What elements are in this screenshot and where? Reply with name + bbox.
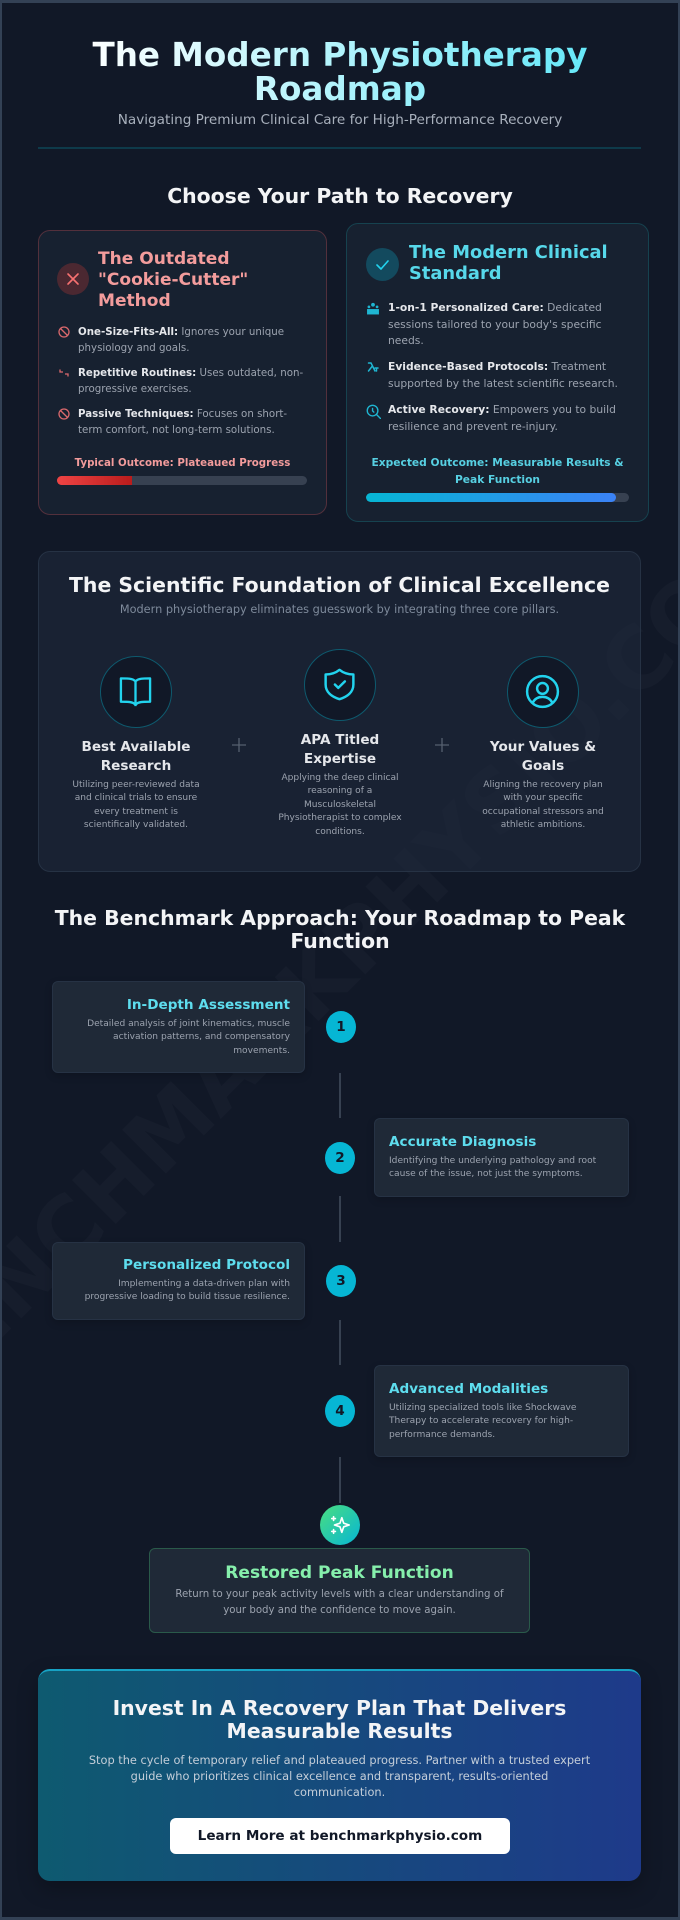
cta heading: Invest In A Recovery Plan That Delivers xyxy=(113,1696,566,1720)
pillar title: Goals xyxy=(522,758,564,774)
step 2 number: 2 xyxy=(335,1150,345,1166)
pillar text: reasoning of a xyxy=(308,786,372,796)
pillar title: Your Values & xyxy=(490,739,596,755)
modern heading: The Modern Clinical xyxy=(409,242,608,263)
timeline connector 4 xyxy=(339,1457,341,1503)
step title: Accurate Diagnosis xyxy=(389,1134,536,1150)
cta heading xyxy=(113,1696,566,1743)
panel: modern standard xyxy=(346,223,649,522)
heading: benchmark approach: The Benchmark Approach: Your Roadmap to Peak xyxy=(55,906,625,930)
step 3 card xyxy=(52,1242,305,1320)
pillar title xyxy=(300,732,379,767)
final title: Restored Peak Function xyxy=(225,1563,454,1583)
step text: Implementing a data-driven plan with xyxy=(118,1278,290,1288)
step text xyxy=(85,1278,290,1302)
icon: magnifier xyxy=(366,404,381,419)
modern item 3: Active Recovery: Empowers you to build xyxy=(388,403,616,416)
step text: activation patterns, and compensatory xyxy=(113,1032,290,1042)
step 4 number: 4 xyxy=(335,1403,345,1419)
modern heading xyxy=(409,242,608,284)
step 4 number xyxy=(325,1395,355,1427)
pillar title: Research xyxy=(101,758,171,774)
title: The Modern Physiotherapy xyxy=(92,36,588,74)
pillar text: scientifically validated. xyxy=(84,820,188,830)
outdated heading xyxy=(98,249,248,311)
outdated heading: The Outdated xyxy=(98,249,230,269)
heading: benchmark approach: Function xyxy=(290,929,390,953)
outdated heading: "Cookie-Cutter" xyxy=(98,270,248,290)
timeline connector 3 xyxy=(339,1320,341,1365)
pillar text xyxy=(482,780,604,830)
pillar text: conditions. xyxy=(315,827,365,837)
outcome label: Expected Outcome: Measurable Results & xyxy=(371,456,624,469)
pillar title: APA Titled xyxy=(301,732,379,748)
modern item 1 xyxy=(388,301,602,347)
icon: user xyxy=(507,656,579,728)
pillar 3 xyxy=(482,656,604,830)
pillar text: every treatment is xyxy=(94,807,178,817)
step 1 card xyxy=(52,981,305,1073)
outcome label: Typical Outcome: Plateaued Progress xyxy=(75,457,290,469)
title xyxy=(0,39,680,106)
outcome label: Peak Function xyxy=(455,472,540,486)
pillar text: Utilizing peer-reviewed data xyxy=(72,780,200,790)
final text: your body and the confidence to move again. xyxy=(223,1605,456,1616)
pillar text: Applying the deep clinical xyxy=(281,772,399,782)
modern item 2: Evidence-Based Protocols: Treatment xyxy=(388,360,606,373)
timeline connector 2 xyxy=(339,1196,341,1242)
pillar text: Physiotherapist to complex xyxy=(278,813,402,823)
step 3 number: 3 xyxy=(336,1273,346,1289)
step text xyxy=(87,1018,290,1056)
step 3 number xyxy=(326,1265,356,1297)
heading: choose your path: Choose Your Path to Recovery xyxy=(167,184,513,208)
step text: performance demands. xyxy=(389,1430,495,1440)
modern item 1: needs. xyxy=(388,334,424,347)
heading: benchmark approach xyxy=(54,906,626,953)
outcome bar xyxy=(366,493,629,502)
icon: shield xyxy=(304,649,376,721)
step text: movements. xyxy=(233,1046,290,1056)
pillar text: Musculoskeletal xyxy=(304,800,376,810)
modern item 3: resilience and prevent re-injury. xyxy=(388,420,558,433)
step text: Therapy to accelerate recovery for high- xyxy=(389,1416,573,1426)
pillar text: occupational stressors and xyxy=(482,807,604,817)
plus sign xyxy=(435,738,449,752)
modern item 2: supported by the latest scientific research. xyxy=(388,377,618,390)
step title: Personalized Protocol xyxy=(123,1257,290,1273)
step text xyxy=(389,1156,596,1179)
outdated item 1: physiology and goals. xyxy=(78,342,190,354)
cta text: Stop the cycle of temporary relief and plateaued progress. Partner with a trusted expert xyxy=(89,1753,590,1767)
icon: cross xyxy=(57,263,89,295)
pillar title xyxy=(490,739,596,774)
step 1 number: 1 xyxy=(336,1019,346,1035)
foundation heading: The Scientific Foundation of Clinical Excellence xyxy=(69,573,610,597)
outdated item 2: progressive exercises. xyxy=(78,383,192,395)
pillar text: athletic ambitions. xyxy=(501,820,585,830)
plus sign xyxy=(232,738,246,752)
step 1 number xyxy=(326,1011,356,1043)
step 2 card xyxy=(374,1118,629,1197)
step 2 number xyxy=(325,1142,355,1174)
step title: In-Depth Assessment xyxy=(127,997,290,1013)
step text: progressive loading to build tissue resilience. xyxy=(85,1292,290,1302)
step text: Utilizing specialized tools like Shockwave xyxy=(389,1402,576,1412)
outdated heading: Method xyxy=(98,291,171,311)
pillar text: and clinical trials to ensure xyxy=(75,793,197,803)
pillar title xyxy=(81,739,191,774)
subtitle: Navigating Premium Clinical Care for High-Performance Recovery xyxy=(118,112,562,128)
outcome bar xyxy=(57,476,307,485)
final text xyxy=(175,1589,504,1616)
step text: Detailed analysis of joint kinematics, muscle xyxy=(87,1018,290,1028)
cta button xyxy=(170,1818,510,1854)
outdated item 2: Repetitive Routines: Uses outdated, non- xyxy=(78,367,303,379)
panel: outdated method xyxy=(38,230,327,515)
pillar text xyxy=(278,772,402,837)
pillar text xyxy=(72,780,200,830)
outdated item 3: Passive Techniques: Focuses on short- xyxy=(78,408,287,420)
timeline connector 1 xyxy=(339,1073,341,1118)
pillar title: Best Available xyxy=(81,739,191,755)
modern item 1: sessions tailored to your body's specific xyxy=(388,318,602,331)
panel: scientific foundation xyxy=(38,551,641,872)
panel: call to action xyxy=(38,1669,641,1881)
modern heading: Standard xyxy=(409,263,502,284)
cta text: guide who prioritizes clinical excellence and transparent, results-oriented xyxy=(131,1769,548,1783)
final text: Return to your peak activity levels with a clear understanding of xyxy=(175,1589,504,1600)
pillar title: Expertise xyxy=(304,751,376,767)
step text: Identifying the underlying pathology and root xyxy=(389,1156,596,1166)
final step card xyxy=(149,1548,530,1633)
modern item 2 xyxy=(388,360,618,390)
outdated item 3: term comfort, not long-term solutions. xyxy=(78,424,275,436)
step text: cause of the issue, not just the symptoms. xyxy=(389,1169,583,1179)
icon: book xyxy=(100,656,172,728)
pillar text: with your specific xyxy=(503,793,583,803)
cta text xyxy=(89,1753,590,1799)
pillar 1 xyxy=(72,656,200,830)
header divider xyxy=(38,147,641,149)
cta button: Learn More at benchmarkphysio.com xyxy=(198,1828,482,1844)
outdated item 1 xyxy=(78,326,284,354)
icon: ban xyxy=(58,326,70,338)
outdated item 1: One-Size-Fits-All: Ignores your unique xyxy=(78,326,284,338)
pillar 2 xyxy=(278,649,402,837)
title: Roadmap xyxy=(254,70,426,108)
cta heading: Measurable Results xyxy=(227,1719,452,1743)
icon: people xyxy=(367,302,379,314)
step title: Advanced Modalities xyxy=(389,1381,548,1397)
icon: check xyxy=(366,248,399,281)
icon: evidence xyxy=(368,362,379,372)
icon: repeat arrows xyxy=(59,370,69,376)
modern item 1: 1-on-1 Personalized Care: Dedicated xyxy=(388,301,602,314)
pillar text: Aligning the recovery plan xyxy=(483,780,603,790)
step 4 card xyxy=(374,1365,629,1457)
outdated item 2 xyxy=(78,367,303,395)
cta text: communication. xyxy=(294,1785,385,1799)
step text xyxy=(389,1402,576,1440)
icon: ban xyxy=(58,408,70,420)
foundation subtitle: Modern physiotherapy eliminates guesswork by integrating three core pillars. xyxy=(120,603,559,616)
outcome label xyxy=(371,456,624,486)
modern item 3 xyxy=(388,403,616,433)
outdated item 3 xyxy=(78,408,287,436)
icon: sparkle badge xyxy=(320,1505,360,1545)
